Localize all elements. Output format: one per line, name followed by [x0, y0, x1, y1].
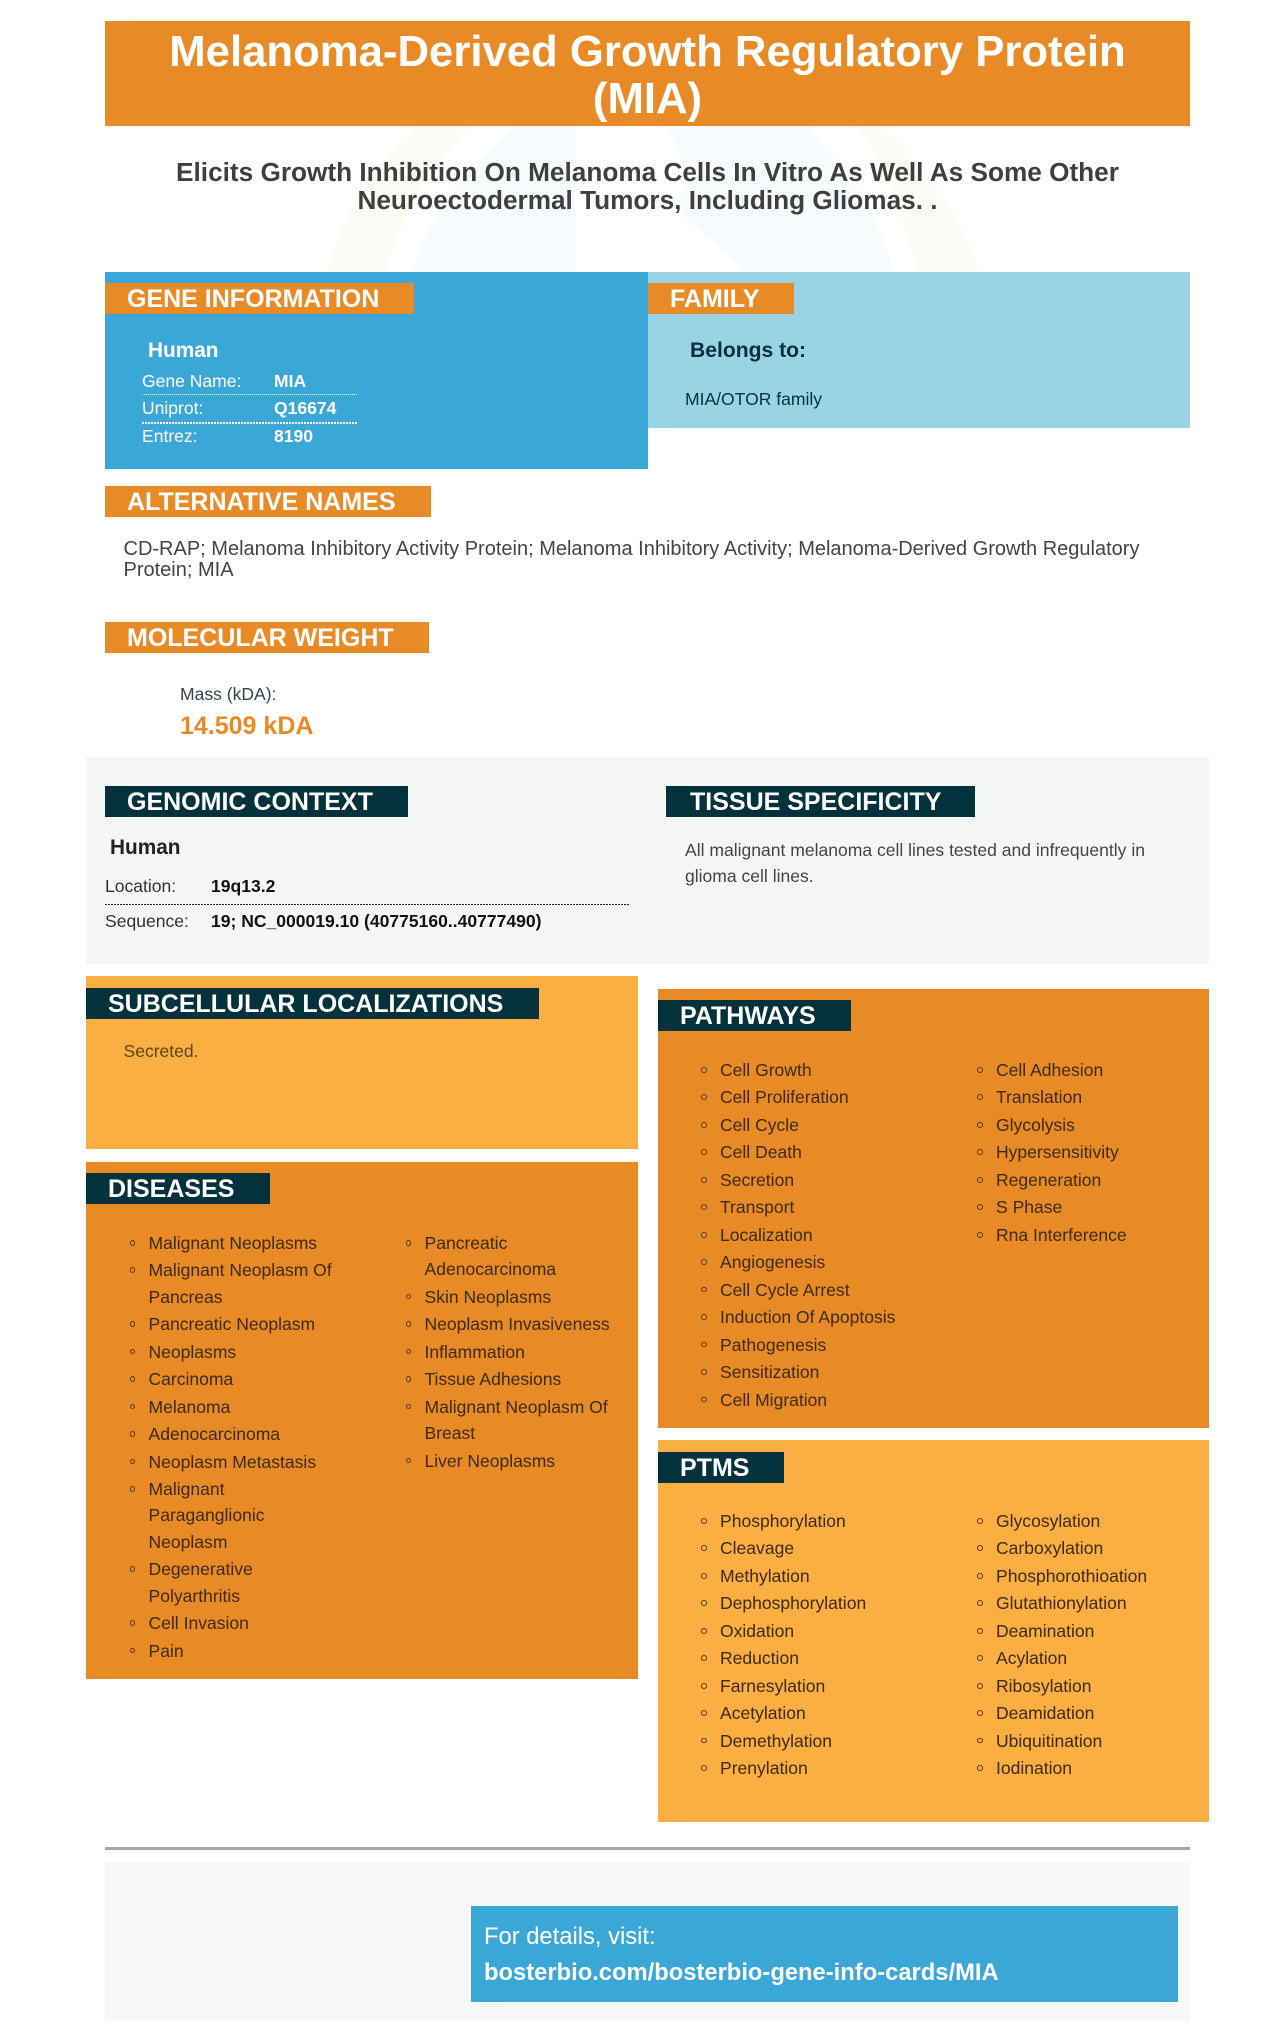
tissue specificity text: All malignant melanoma cell lines tested and infrequently in glioma cell lines. [685, 840, 1145, 886]
title banner: Melanoma-Derived Growth Regulatory Protein [169, 27, 1126, 76]
diseases list column 2: Inflammation [424, 1342, 525, 1362]
pathways list column 1: Pathogenesis [720, 1335, 826, 1355]
heading: diseases: DISEASES [108, 1175, 234, 1203]
ptms list column 1: Oxidation [720, 1621, 794, 1641]
heading: molecular weight: MOLECULAR WEIGHT [127, 624, 394, 652]
diseases list column 1: Pancreatic Neoplasm [148, 1314, 315, 1334]
entrez row: 8190 [274, 426, 313, 446]
diseases list column 1: Cell Invasion [148, 1613, 249, 1633]
heading: diseases [86, 1173, 270, 1204]
pathways list column 2: Rna Interference [996, 1225, 1127, 1245]
panel: diseases [86, 1162, 638, 1679]
species label: Human [148, 339, 218, 362]
location row: 19q13.2 [211, 876, 275, 896]
mass label: Mass (kDA): [180, 684, 276, 704]
alternative names text: CD-RAP; Melanoma Inhibitory Activity Protein; Melanoma Inhibitory Activity; Melanoma-Derived Growth Regulatory Protein; MIA [124, 538, 1139, 581]
pathways list column 2 [977, 1060, 1127, 1245]
ptms list column 2: Acylation [996, 1648, 1067, 1668]
diseases list column 2: Pancreatic [424, 1233, 507, 1253]
entrez row [142, 426, 313, 446]
ptms list column 2: Ubiquitination [996, 1731, 1102, 1751]
sequence row: 19; NC_000019.10 (40775160..40777490) [211, 911, 541, 931]
ptms list column 2: Carboxylation [996, 1538, 1103, 1558]
diseases list column 2: Skin Neoplasms [424, 1287, 551, 1307]
ptms list column 1: Cleavage [720, 1538, 794, 1558]
ptms list column 2: Deamination [996, 1621, 1094, 1641]
pathways list column 1 [701, 1060, 895, 1410]
heading: genomic context: GENOMIC CONTEXT [127, 788, 373, 816]
diseases list column 1: Neoplasm [148, 1532, 227, 1552]
mass value: 14.509 kDA [180, 712, 313, 740]
diseases list column 1: Malignant Neoplasms [148, 1233, 317, 1253]
sequence row: Sequence: [105, 911, 189, 931]
ptms list column 1: Methylation [720, 1566, 810, 1586]
ptms list column 1: Acetylation [720, 1703, 806, 1723]
diseases list column 1: Malignant Neoplasm Of Pancreas [148, 1260, 332, 1307]
pathways list column 1: Cell Cycle Arrest [720, 1280, 850, 1300]
diseases list column 2: Tissue Adhesions [424, 1369, 561, 1389]
panel: gene information [105, 272, 648, 469]
diseases list column 1 [130, 1233, 332, 1661]
diseases list column 1: Melanoma [148, 1397, 230, 1417]
heading: family [648, 283, 794, 314]
ptms list column 2: Glycosylation [996, 1511, 1100, 1531]
callout url: bosterbio.com/bosterbio-gene-info-cards/MIA [484, 1959, 999, 1986]
gene name row [142, 369, 357, 395]
diseases list column 1: Neoplasm Metastasis [148, 1452, 316, 1472]
diseases list column 1: Neoplasms [148, 1342, 236, 1362]
diseases list column 1: Adenocarcinoma [148, 1424, 280, 1444]
subtitle: Neuroectodermal Tumors, Including Gliomas. . [357, 185, 938, 215]
diseases list column 1: Polyarthritis [148, 1586, 240, 1606]
uniprot row: Uniprot: [142, 398, 203, 418]
heading: subcellular localizations: SUBCELLULAR LOCALIZATIONS [108, 990, 503, 1018]
callout text: For details, visit: [484, 1923, 656, 1950]
gene name row: MIA [274, 371, 306, 391]
ptms list column 1: Reduction [720, 1648, 799, 1668]
subtitle [176, 157, 1119, 215]
diseases list column 1: Degenerative [148, 1559, 253, 1579]
pathways list column 1: Cell Proliferation [720, 1087, 849, 1107]
ptms list column 1: Demethylation [720, 1731, 832, 1751]
panel: pathways [658, 989, 1209, 1428]
panel: footer [105, 1862, 1190, 2021]
pathways list column 2: Hypersensitivity [996, 1142, 1119, 1162]
subcellular text: Secreted. [124, 1041, 199, 1061]
heading: pathways: PATHWAYS [680, 1002, 816, 1030]
uniprot row: Q16674 [274, 398, 336, 418]
heading: family: FAMILY [670, 285, 759, 313]
pathways list column 2: Regeneration [996, 1170, 1101, 1190]
heading: ptms [658, 1452, 784, 1483]
diseases list column 2: Liver Neoplasms [424, 1450, 555, 1470]
ptms list column 1: Farnesylation [720, 1676, 825, 1696]
title banner [105, 21, 1190, 126]
pathways list column 2: Cell Adhesion [996, 1060, 1103, 1080]
diseases list column 1: Pain [148, 1641, 184, 1661]
panel: genomic context and tissue specificity [86, 757, 1209, 964]
ptms list column 2 [977, 1511, 1147, 1778]
diseases list column 2: Malignant Neoplasm Of Breast [424, 1397, 608, 1443]
ptms list column 1 [701, 1511, 866, 1778]
pathways list column 1: Induction Of Apoptosis [720, 1307, 895, 1327]
heading: ptms: PTMS [680, 1454, 749, 1482]
ptms list column 1: Prenylation [720, 1758, 808, 1778]
diseases list column 1: Malignant [148, 1479, 225, 1499]
ptms list column 2: Deamidation [996, 1703, 1094, 1723]
pathways list column 1: Cell Growth [720, 1060, 812, 1080]
diseases list column 2: Neoplasm Invasiveness [424, 1314, 610, 1334]
heading: gene information: GENE INFORMATION [127, 285, 379, 313]
subtitle: Elicits Growth Inhibition On Melanoma Cells In Vitro As Well As Some Other [176, 157, 1119, 187]
location row: Location: [105, 876, 176, 896]
panel: family [648, 272, 1190, 428]
ptms list column 1: Dephosphorylation [720, 1593, 866, 1613]
pathways list column 1: Cell Migration [720, 1390, 827, 1410]
entrez row: Entrez: [142, 426, 198, 446]
pathways list column 1: Transport [720, 1197, 794, 1217]
pathways list column 2: Translation [996, 1087, 1082, 1107]
callout: details link [471, 1906, 1178, 2002]
diseases list column 1: Paraganglionic [148, 1505, 264, 1525]
gene name row: Gene Name: [142, 371, 241, 391]
pathways list column 1: Angiogenesis [720, 1252, 825, 1272]
diseases list column 1: Carcinoma [148, 1369, 233, 1389]
panel: ptms [658, 1440, 1209, 1822]
panel: subcellular localizations [86, 976, 638, 1149]
pathways list column 2: S Phase [996, 1197, 1062, 1217]
species label: Human [110, 836, 180, 859]
pathways list column 1: Secretion [720, 1170, 794, 1190]
pathways list column 1: Localization [720, 1225, 813, 1245]
ptms list column 2: Glutathionylation [996, 1593, 1127, 1613]
belongs to label: Belongs to: [690, 339, 806, 362]
family value: MIA/OTOR family [685, 389, 822, 409]
heading: pathways [658, 1000, 851, 1031]
ptms list column 1: Phosphorylation [720, 1511, 846, 1531]
pathways list column 1: Sensitization [720, 1362, 819, 1382]
ptms list column 2: Iodination [996, 1758, 1072, 1778]
title banner: (MIA) [593, 74, 702, 123]
pathways list column 1: Cell Death [720, 1142, 802, 1162]
pathways list column 2: Glycolysis [996, 1115, 1075, 1135]
ptms list column 2: Ribosylation [996, 1676, 1092, 1696]
pathways list column 1: Cell Cycle [720, 1115, 799, 1135]
ptms list column 2: Phosphorothioation [996, 1566, 1147, 1586]
diseases list column 2 [406, 1233, 610, 1470]
location row [105, 874, 629, 905]
heading: tissue specificity: TISSUE SPECIFICITY [690, 788, 941, 816]
uniprot row [142, 395, 357, 424]
heading: alternative names: ALTERNATIVE NAMES [127, 488, 396, 516]
diseases list column 2: Adenocarcinoma [424, 1259, 556, 1279]
